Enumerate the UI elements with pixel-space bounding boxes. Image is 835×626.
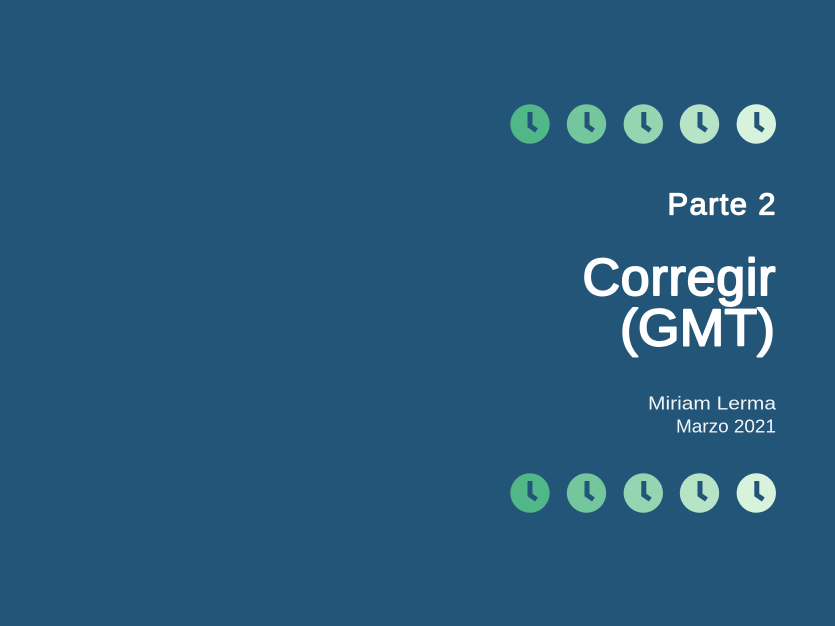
- icon: clock 3: [624, 104, 663, 144]
- icon: clock 2: [567, 104, 606, 144]
- author: Miriam Lerma: [648, 394, 777, 414]
- date: Marzo 2021: [676, 416, 776, 436]
- icon: clock 4: [680, 473, 719, 513]
- title line 1: Corregir: [582, 249, 776, 307]
- title: [582, 249, 776, 358]
- icon: clock 1: [510, 473, 550, 513]
- icon: clock 1: [510, 104, 550, 144]
- title line 2: (GMT): [620, 300, 775, 358]
- author and date: [648, 394, 777, 436]
- icon: clock 5: [737, 473, 776, 513]
- icon row: top clocks: [510, 104, 776, 144]
- icon: clock 4: [680, 104, 719, 144]
- subtitle: part number: Parte 2: [668, 186, 776, 222]
- icon row: bottom clocks: [510, 473, 776, 513]
- icon: clock 2: [567, 473, 606, 513]
- icon: clock 5: [737, 104, 776, 144]
- icon: clock 3: [624, 473, 663, 513]
